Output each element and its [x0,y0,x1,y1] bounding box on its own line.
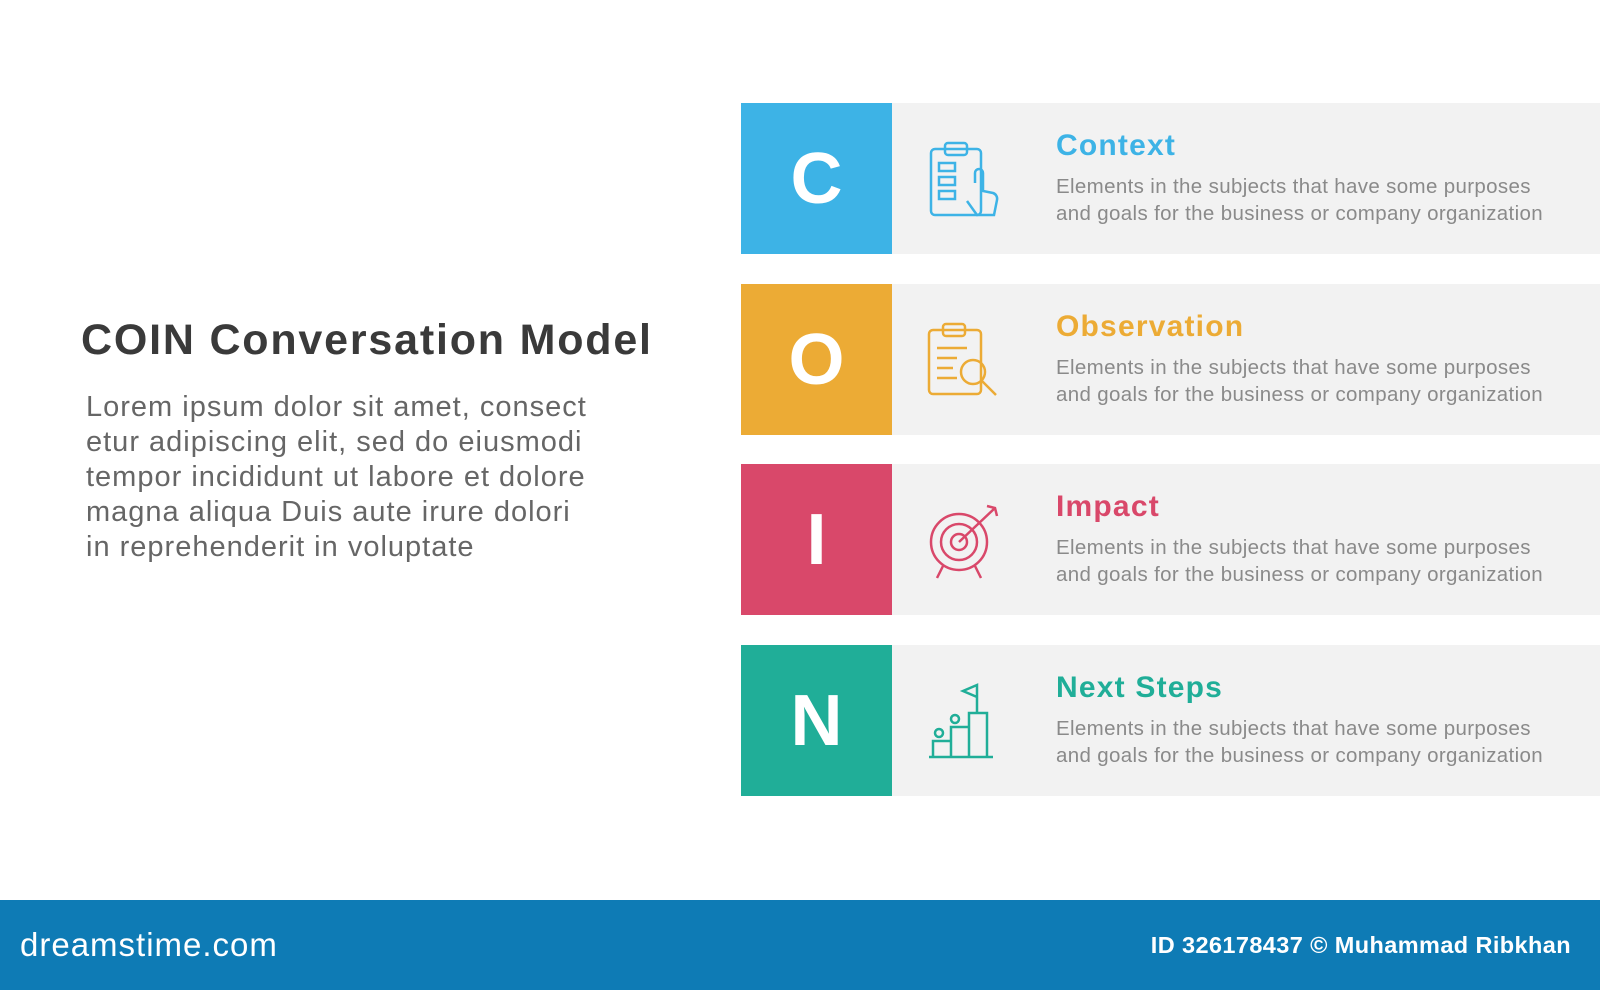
description: Elements in the subjects that have some purposes [1056,717,1531,740]
description [1056,536,1543,586]
description: and goals for the business or company organization [1056,563,1543,586]
intro paragraph: magna aliqua Duis aute irure dolori [86,496,571,528]
description [1056,356,1543,406]
row: Next Steps [741,645,1600,796]
description: and goals for the business or company organization [1056,744,1543,767]
description [1056,175,1543,225]
letter box N: N [790,680,842,760]
description: Elements in the subjects that have some purposes [1056,175,1531,198]
heading: Observation [1056,310,1244,343]
footer credit: ID 326178437 © Muhammad Ribkhan [1151,932,1571,958]
heading: Context [1056,129,1176,162]
icon: target [930,504,998,578]
intro paragraph: in reprehenderit in voluptate [86,531,475,563]
letter box O [741,284,892,435]
description: and goals for the business or company organization [1056,383,1543,406]
icon: clipboard [930,142,998,216]
letter box C: C [790,138,842,218]
row: Observation [741,284,1600,435]
heading: Impact [1056,490,1160,523]
letter box I [741,464,892,615]
intro paragraph: Lorem ipsum dolor sit amet, consect [86,391,587,423]
icon: stairs flag [929,683,993,758]
intro paragraph: tempor incididunt ut labore et dolore [86,461,586,493]
intro paragraph: etur adipiscing elit, sed do eiusmodi [86,426,582,458]
title: COIN Conversation Model [81,316,653,364]
icon: clipboard magnifier [928,322,997,396]
footer logo: dreamstime.com [20,926,278,963]
letter box N [741,645,892,796]
letter box O: O [788,320,844,400]
heading: Next Steps [1056,671,1223,704]
intro paragraph [86,391,587,563]
description: and goals for the business or company organization [1056,202,1543,225]
description: Elements in the subjects that have some purposes [1056,536,1531,559]
footer bar [0,900,1600,990]
description: Elements in the subjects that have some purposes [1056,356,1531,379]
row: Impact [741,464,1600,615]
letter box I: I [806,500,826,580]
description [1056,717,1543,767]
row: Context [741,103,1600,254]
letter box C [741,103,892,254]
